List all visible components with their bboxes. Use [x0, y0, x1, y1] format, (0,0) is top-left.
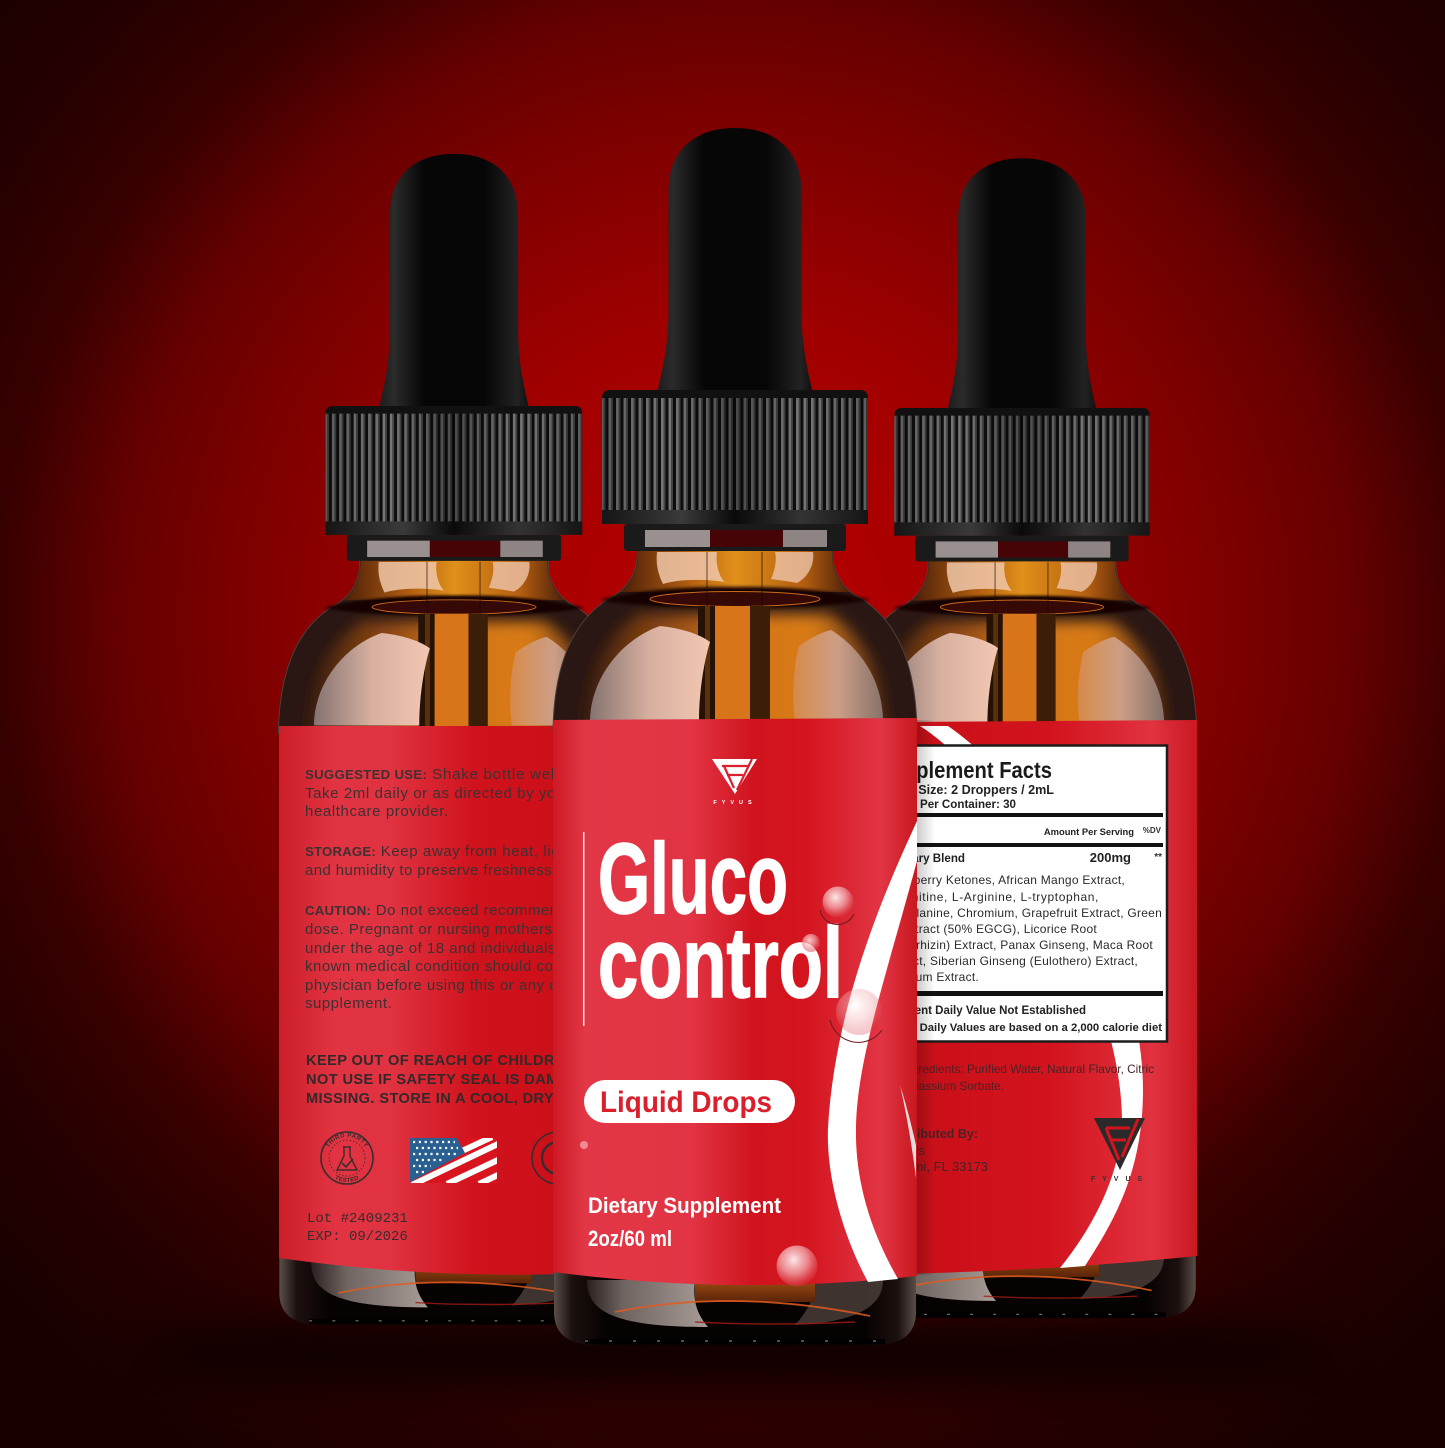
caution text: dose. Pregnant or nursing mothers, children	[305, 921, 618, 938]
product name line two: control	[598, 907, 843, 1019]
warning text	[306, 1053, 630, 1107]
storage continuation: and humidity to preserve freshness.	[305, 862, 557, 879]
distributor name: Fyvus	[890, 1143, 925, 1158]
blend daily value: **	[1154, 852, 1162, 863]
blend row: Proprietary Blend	[868, 852, 965, 865]
badge: third party tested: TESTED	[336, 1175, 358, 1182]
suggested use end: healthcare provider.	[305, 803, 449, 820]
warning text: MISSING. STORE IN A COOL, DRY PLACE.	[306, 1091, 614, 1107]
pill text: Liquid Drops	[600, 1086, 772, 1119]
ingredient list: (Glycyrrhizin) Extract, Panax Ginseng, Maca Root	[876, 938, 1153, 952]
right bottle glass and dropper	[847, 158, 1197, 1318]
label swoosh	[920, 726, 1143, 1268]
center bottle	[553, 128, 917, 1345]
left bottle back label	[279, 726, 560, 1275]
caution text: supplement.	[305, 995, 392, 1012]
badge: third party tested: THIRD PARTY	[325, 1132, 368, 1147]
supplement facts panel	[839, 746, 1167, 1042]
serving size: Serving Size: 2 Droppers / 2mL	[869, 783, 1054, 797]
right bottle	[839, 158, 1197, 1318]
ingredient list	[839, 873, 1162, 984]
badge: good manufacturing	[532, 1132, 584, 1184]
right bottle label	[900, 720, 1197, 1274]
blend amount: 200mg	[1090, 850, 1131, 865]
center shadow on side bottles	[917, 720, 935, 1275]
servings per container: Servings Per Container: 30	[868, 798, 1016, 811]
caution text: known medical condition should consult a	[305, 958, 601, 975]
suggested use continuation: Take 2ml daily or as directed by your	[305, 785, 571, 802]
label swoosh sliver	[900, 1085, 916, 1178]
caution text	[305, 902, 618, 1012]
label swoosh	[828, 821, 917, 1282]
suggested use text: SUGGESTED USE: Shake bottle well.	[305, 766, 564, 783]
center bottle label	[553, 718, 917, 1285]
left bottle glass and dropper	[278, 154, 630, 1325]
other ingredients: Other Ingredients: Purified Water, Natural Flavor, Citric	[869, 1062, 1154, 1076]
floor shadow	[135, 1320, 1335, 1384]
storage text: STORAGE: Keep away from heat, light	[305, 843, 574, 860]
product name line one: Gluco	[598, 823, 788, 935]
caution text: physician before using this or any dietary	[305, 977, 598, 994]
calorie note: † Percent Daily Values are based on a 2,000 calorie diet	[866, 1022, 1162, 1034]
caution text: CAUTION: Do not exceed recommended	[305, 902, 585, 919]
net contents: 2oz/60 ml	[588, 1226, 672, 1251]
daily value note: * Percent Daily Value Not Established	[882, 1005, 1086, 1017]
warning text: KEEP OUT OF REACH OF CHILDREN. DO	[306, 1053, 608, 1069]
distributor heading: Distributed By:	[888, 1127, 978, 1141]
distributor address: Miami, FL 33173	[892, 1159, 988, 1174]
liquid drops pill	[584, 1080, 795, 1123]
icon: dark brand logo	[1091, 1118, 1149, 1183]
badge: third party tested	[320, 1131, 374, 1185]
ingredient list: Raspberry Ketones, African Mango Extract,	[885, 873, 1125, 887]
decorative droplets	[580, 886, 882, 1286]
ingredient list: Chromium Extract.	[875, 970, 979, 984]
center bottle glass and dropper	[553, 128, 917, 1345]
expiry: EXP: 09/2026	[307, 1229, 408, 1245]
other ingredients end: Acid, Potassium Sorbate.	[872, 1079, 1004, 1093]
facts heading: Supplement Facts	[878, 757, 1052, 783]
lot number: Lot #2409231	[307, 1211, 408, 1227]
ingredient list: Tea Extract (50% EGCG), Licorice Root	[877, 922, 1097, 936]
amount header: Amount Per Serving	[1044, 826, 1134, 837]
ingredient list: Extract, Siberian Ginseng (Eulothero) Extract,	[884, 954, 1138, 968]
daily value header: %DV	[1143, 826, 1162, 835]
icon: brand logo	[712, 759, 757, 806]
warning text: NOT USE IF SAFETY SEAL IS DAMAGED OR	[306, 1072, 630, 1088]
icon: brand logo: FYVUS	[713, 800, 757, 806]
dietary supplement text: Dietary Supplement	[588, 1193, 781, 1218]
vertical divider	[583, 832, 584, 1026]
caution text: under the age of 18 and individuals with a	[305, 940, 603, 957]
icon: american flag	[410, 1137, 500, 1185]
ingredient list: Acetyl L-Carnitine, L-Arginine, L-tryptophan,	[839, 890, 1099, 904]
left bottle	[278, 154, 630, 1325]
icon: dark brand logo: FYVUS	[1091, 1176, 1149, 1183]
ingredient list: L-Phenylalanine, Chromium, Grapefruit Extract, Green	[860, 906, 1162, 920]
